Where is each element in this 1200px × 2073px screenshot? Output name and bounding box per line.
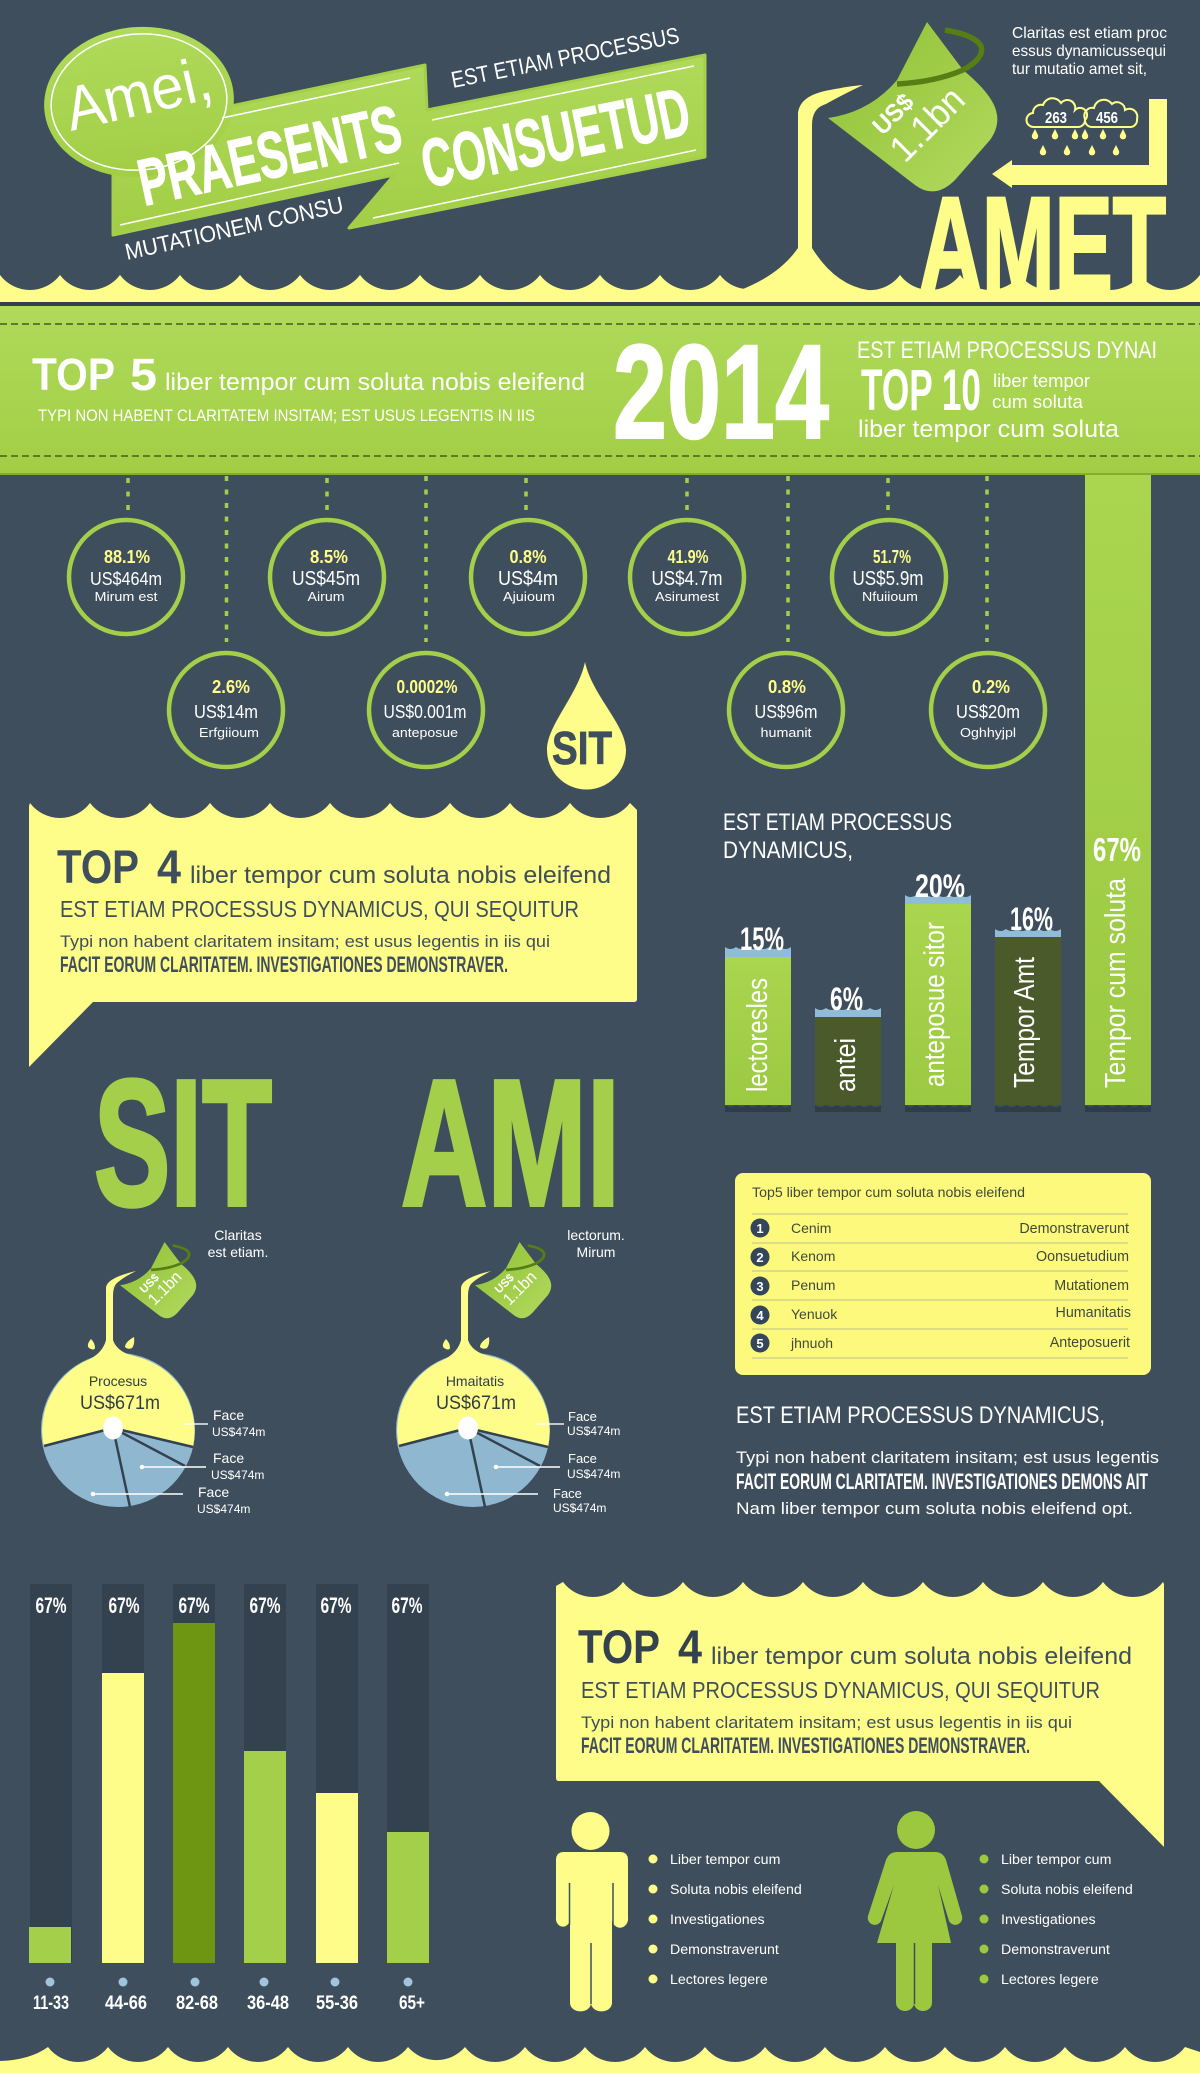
caps line: EST ETIAM PROCESSUS DYNAMICUS, QUI SEQUITUR xyxy=(60,896,579,922)
table right column xyxy=(1019,1221,1131,1351)
icon: man figure xyxy=(556,1812,628,2011)
bar percent labels: 67% xyxy=(36,1593,66,1618)
list: man: Lectores legere xyxy=(670,1972,768,1988)
table left column: Penum xyxy=(791,1277,835,1293)
icon: rain clouds: 263 xyxy=(1045,110,1067,127)
wave strip bottom xyxy=(0,2047,1200,2073)
arrow xyxy=(992,99,1167,188)
heading: AMI: AMI xyxy=(401,1043,620,1244)
icon: small pitcher left: 1.1bn xyxy=(144,1267,185,1309)
title ribbon banner: CONSUETUD xyxy=(415,74,696,203)
bold line: FACIT EORUM CLARITATEM. INVESTIGATIONES DEMONSTRAVER. xyxy=(60,952,508,977)
stat circle: Ajuioum: 0.8% xyxy=(510,547,546,567)
right caption: liber tempor cum soluta xyxy=(858,416,1120,443)
caption: top 5: TYPI NON HABENT CLARITATEM INSITAM; EST USUS LEGENTIS IN IIS xyxy=(38,406,535,425)
pie texts left: Face xyxy=(198,1484,229,1500)
subheading: liber tempor cum soluta nobis eleifend xyxy=(190,862,611,889)
stat circle: Mirum est: 88.1% xyxy=(104,547,150,567)
strip under waves xyxy=(0,302,1200,306)
bar percent labels: 67% xyxy=(108,1593,140,1618)
bar: Tempor Amt 16%: 16% xyxy=(1010,901,1053,937)
text: top-right note: essus dynamicussequi xyxy=(1012,43,1166,60)
axis labels: 55-36 xyxy=(316,1993,358,2014)
title ribbon banner: EST ETIAM PROCESSUS xyxy=(449,22,681,93)
heading: top 5: 5 xyxy=(130,349,157,400)
icon: small pitcher right: 1.1bn xyxy=(499,1267,540,1309)
title ribbon banner: Amei, xyxy=(59,44,218,145)
bar: antei 6%: 6% xyxy=(830,981,863,1017)
pie texts right: Face xyxy=(553,1486,582,1501)
icon: pitcher large: US$ xyxy=(867,88,920,141)
bar: Tempor cum soluta 67% xyxy=(1085,475,1151,1112)
pie group left xyxy=(41,1227,268,1516)
top 10 side text: cum soluta xyxy=(992,392,1084,412)
top 10 side text: liber tempor xyxy=(993,371,1090,391)
bar tracks xyxy=(30,1584,429,1963)
pie texts right: Face xyxy=(568,1451,597,1466)
stat circle: Asirumest: Asirumest xyxy=(655,589,719,604)
heading: top 4: 4 xyxy=(678,1620,702,1673)
top 10 side text xyxy=(992,371,1090,412)
stat circle: Asirumest: US$4.7m xyxy=(652,568,722,590)
list: woman: Demonstraverunt xyxy=(1001,1942,1110,1958)
icon: pitcher large xyxy=(828,22,997,191)
pie texts left: Claritas xyxy=(214,1227,262,1243)
bar fills xyxy=(29,1623,429,1963)
axis labels: 44-66 xyxy=(105,1993,147,2014)
pie group right xyxy=(396,1227,625,1515)
pie leader lines right xyxy=(446,1424,564,1496)
icon: small pitcher right: US$ xyxy=(493,1271,517,1296)
stat circle: Asirumest xyxy=(630,520,744,634)
axis labels: 82-68 xyxy=(176,1993,218,2014)
bar: antei 6% xyxy=(815,981,881,1112)
pie texts right: Mirum xyxy=(577,1244,615,1260)
pie texts right xyxy=(436,1227,625,1515)
yellow spout stream xyxy=(743,85,868,302)
stat circle: humanit: US$96m xyxy=(754,702,818,722)
text: top-right note: Claritas est etiam proc xyxy=(1012,25,1167,42)
panel: green year band xyxy=(0,306,1200,475)
icon: pitcher large: 1.1bn xyxy=(882,79,973,170)
text: top-right note: tur mutatio amet sit, xyxy=(1012,61,1147,78)
body line: Typi non habent claritatem insitam; est usus legentis in iis qui xyxy=(60,932,550,951)
heading: top 5: TOP xyxy=(32,349,115,400)
subheading: top 5: liber tempor cum soluta nobis eleifend xyxy=(165,369,585,396)
table right column: Demonstraverunt xyxy=(1019,1221,1129,1237)
stat circle: Ajuioum: US$4m xyxy=(498,568,558,590)
list: man: Liber tempor cum xyxy=(670,1852,780,1868)
icon: rain clouds xyxy=(1026,98,1137,155)
pie chart right xyxy=(396,1271,550,1507)
table left column xyxy=(790,1220,838,1351)
pie texts right: Face xyxy=(568,1409,597,1424)
bar percent labels: 67% xyxy=(250,1593,280,1618)
text block under table: Typi non habent claritatem insitam; est usus legentis xyxy=(736,1448,1159,1467)
bar percent labels xyxy=(36,1593,422,1618)
pie texts left: Face xyxy=(213,1450,244,1466)
stat circle: Airum xyxy=(270,520,384,634)
pie chart left xyxy=(41,1271,195,1507)
text block under table xyxy=(736,1402,1159,1518)
table right column: Mutationem xyxy=(1054,1278,1129,1294)
table left column: Yenuok xyxy=(791,1306,838,1322)
heading: top 4: TOP xyxy=(57,840,139,893)
stat circle: Mirum est: US$464m xyxy=(90,569,162,589)
table number badges: 3 xyxy=(756,1279,764,1294)
bar percent labels: 67% xyxy=(392,1593,422,1618)
bar: lectoresles 15%: 15% xyxy=(740,921,784,957)
stat circle: Erfgiioum: Erfgiioum xyxy=(199,725,259,740)
pie texts left: US$474m xyxy=(212,1425,265,1439)
chart heading: EST ETIAM PROCESSUS xyxy=(723,809,952,836)
list: man: Soluta nobis eleifend xyxy=(670,1882,802,1898)
stat circle: Nfuiioum: 51.7% xyxy=(873,547,911,567)
pie leader lines left xyxy=(92,1424,208,1496)
pie texts left: US$474m xyxy=(197,1502,250,1516)
bar percent labels: 67% xyxy=(178,1593,210,1618)
table number badges: 5 xyxy=(756,1336,764,1351)
text: top-right note xyxy=(1012,25,1167,78)
pie texts left: Procesus xyxy=(89,1373,147,1389)
icon: small pitcher right xyxy=(475,1242,551,1318)
list: woman: Investigationes xyxy=(1001,1912,1096,1928)
stat circle: Nfuiioum xyxy=(832,520,946,634)
stat circle: humanit: 0.8% xyxy=(768,677,806,697)
axis dots xyxy=(46,1978,412,1986)
stat circle: anteposue xyxy=(369,653,483,767)
table title: Top5 liber tempor cum soluta nobis eleifend xyxy=(752,1184,1025,1200)
stat circle: Ajuioum: Ajuioum xyxy=(503,589,555,604)
icon: woman figure xyxy=(868,1811,962,2011)
dotted connectors xyxy=(128,476,987,642)
axis labels: 11-33 xyxy=(33,1993,69,2014)
heading: top 4: 4 xyxy=(157,840,181,893)
axis labels: 65+ xyxy=(399,1993,425,2014)
table left column: jhnuoh xyxy=(790,1335,833,1351)
text block under table: Nam liber tempor cum soluta nobis eleifend opt. xyxy=(736,1499,1133,1518)
text block under table: EST ETIAM PROCESSUS DYNAMICUS, xyxy=(736,1402,1105,1429)
table number badges: 1 xyxy=(756,1221,764,1236)
bar: anteposue sitor 20%: anteposue sitor xyxy=(919,922,951,1087)
icon: rain clouds: 456 xyxy=(1096,110,1118,127)
table number badges xyxy=(750,1218,770,1352)
stat circle: anteposue: US$0.001m xyxy=(384,702,466,722)
bar: Tempor cum soluta 67%: Tempor cum soluta xyxy=(1100,877,1132,1088)
pie texts right: US$474m xyxy=(567,1424,620,1438)
icon: small pitcher left xyxy=(120,1242,196,1318)
title ribbon banner xyxy=(38,19,705,265)
table right column: Humanitatis xyxy=(1056,1305,1131,1321)
title ribbon banner: PRAESENTS xyxy=(131,90,408,220)
stat circle: Asirumest: 41.9% xyxy=(668,547,708,567)
icon: small pitcher left: US$ xyxy=(138,1271,162,1296)
table right column: Anteposuerit xyxy=(1050,1335,1130,1351)
stat circle: Nfuiioum: Nfuiioum xyxy=(862,589,918,604)
bar: lectoresles 15%: lectoresles xyxy=(742,978,774,1092)
bar: anteposue sitor 20% xyxy=(905,868,971,1112)
stat circle: Mirum est: Mirum est xyxy=(94,589,158,604)
bar: antei 6%: antei xyxy=(830,1038,862,1092)
body line: Typi non habent claritatem insitam; est usus legentis in iis qui xyxy=(581,1713,1072,1732)
pie texts right: US$671m xyxy=(436,1393,516,1414)
panel: top 5 table xyxy=(735,1173,1151,1375)
pie texts left: US$474m xyxy=(211,1468,264,1482)
subheading: liber tempor cum soluta nobis eleifend xyxy=(711,1643,1132,1670)
stat circle: Oghhyjpl: 0.2% xyxy=(972,677,1010,697)
stat circle: anteposue: 0.0002% xyxy=(396,677,458,697)
chart heading: DYNAMICUS, xyxy=(723,837,853,864)
stat circle: Erfgiioum: 2.6% xyxy=(212,677,250,697)
table right column: Oonsuetudium xyxy=(1036,1249,1129,1265)
heading: top 4: TOP xyxy=(578,1620,660,1673)
stat circle: Oghhyjpl xyxy=(931,653,1045,767)
wave strip top xyxy=(0,275,1200,302)
bottom-left bar chart xyxy=(29,1584,429,2014)
pie texts right: lectorum. xyxy=(567,1227,625,1243)
list: woman: Liber tempor cum xyxy=(1001,1852,1111,1868)
table number badges: 4 xyxy=(756,1308,764,1323)
list: man: Demonstraverunt xyxy=(670,1942,779,1958)
stat circle: Ajuioum xyxy=(471,520,585,634)
list: man: Investigationes xyxy=(670,1912,765,1928)
bar percent labels: 67% xyxy=(320,1593,352,1618)
panel: speech box top 4 left xyxy=(29,803,637,1067)
bar: Tempor Amt 16%: Tempor Amt xyxy=(1009,957,1041,1088)
list: woman: Lectores legere xyxy=(1001,1972,1099,1988)
chart heading xyxy=(723,809,952,864)
stat circle: Airum: Airum xyxy=(308,589,344,604)
pie texts left: est etiam. xyxy=(208,1244,268,1260)
pie texts left: Face xyxy=(213,1407,244,1423)
table left column: Cenim xyxy=(791,1220,831,1236)
heading: top 10: TOP 10 xyxy=(861,358,981,423)
pie texts right: US$474m xyxy=(567,1467,620,1481)
stat circle: humanit xyxy=(729,653,843,767)
axis labels xyxy=(33,1993,425,2014)
pie texts left xyxy=(80,1227,268,1516)
list: man xyxy=(648,1852,802,1988)
stat circle: Mirum est xyxy=(69,520,183,634)
title ribbon banner: MUTATIONEM CONSU xyxy=(122,191,346,265)
stat circle: Erfgiioum: US$14m xyxy=(194,702,258,722)
caps line: EST ETIAM PROCESSUS DYNAMICUS, QUI SEQUITUR xyxy=(581,1677,1100,1703)
table left column: Kenom xyxy=(791,1248,835,1264)
bar: Tempor cum soluta 67%: 67% xyxy=(1093,831,1141,868)
stat circle: Erfgiioum xyxy=(169,653,283,767)
stat circle: humanit: humanit xyxy=(760,725,812,740)
stat circle: Nfuiioum: US$5.9m xyxy=(852,568,924,590)
pie texts left: US$671m xyxy=(80,1393,160,1414)
list: woman: Soluta nobis eleifend xyxy=(1001,1882,1133,1898)
pie texts right: US$474m xyxy=(553,1501,606,1515)
stat circle: Oghhyjpl: Oghhyjpl xyxy=(960,725,1016,740)
panel: speech box top 4 right xyxy=(556,1582,1164,1847)
stat circle: Airum: 8.5% xyxy=(310,547,348,567)
stat circle: anteposue: anteposue xyxy=(392,725,458,740)
axis labels: 36-48 xyxy=(247,1993,289,2014)
list: woman xyxy=(980,1852,1133,1988)
heading: SIT: SIT xyxy=(94,1043,272,1244)
bar: lectoresles 15% xyxy=(725,921,791,1112)
bar: Tempor Amt 16% xyxy=(995,901,1061,1112)
year 2014: 2014 xyxy=(613,318,829,467)
icon: SIT drop xyxy=(547,662,626,790)
bar: anteposue sitor 20%: 20% xyxy=(915,868,965,904)
stat circle: Oghhyjpl: US$20m xyxy=(956,702,1020,722)
stat circle: Airum: US$45m xyxy=(292,568,360,590)
table number badges: 2 xyxy=(756,1250,764,1265)
icon: SIT drop: SIT xyxy=(552,722,612,774)
pie texts right: Hmaitatis xyxy=(446,1373,504,1389)
